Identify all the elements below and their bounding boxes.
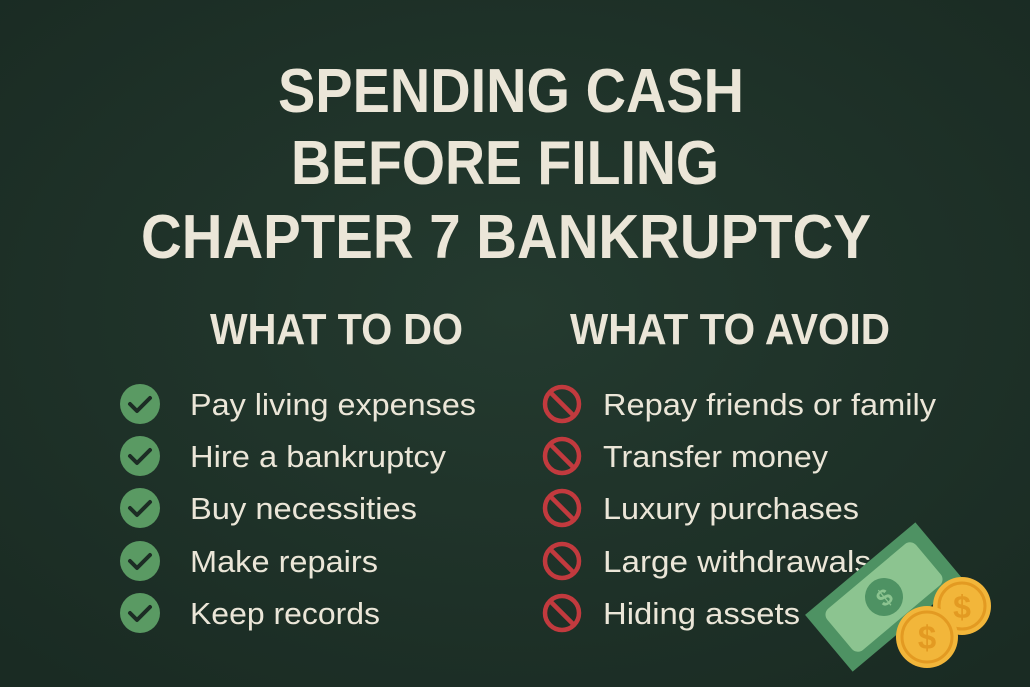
title: CHAPTER 7 BANKRUPTCY [141,203,871,272]
icon: money bill and coins [805,522,991,672]
list: what to do: Buy necessities [190,491,417,526]
heading: what to do: WHAT TO DO [210,305,463,354]
title: SPENDING CASH [278,57,744,126]
list: what to avoid [545,387,937,631]
list: what to avoid: Large withdrawals [603,544,871,579]
title: BEFORE FILING [291,129,719,198]
list: what to avoid: Repay friends or family [603,387,937,422]
list: what to do [120,384,476,633]
list: what to avoid: Transfer money [603,439,829,474]
list: what to do: Keep records [190,596,380,631]
list: what to do: Pay living expenses [190,387,476,422]
icon: money bill and coins: $ [953,589,971,625]
list: what to do: Hire a bankruptcy [190,439,447,474]
icon: money bill and coins: $ [918,619,936,656]
list: what to avoid: Luxury purchases [603,491,859,526]
list: what to avoid: Hiding assets [603,596,800,631]
icon: money bill and coins: $ [871,583,899,613]
heading: what to avoid: WHAT TO AVOID [570,305,890,354]
title [141,57,871,272]
list: what to do: Make repairs [190,544,378,579]
